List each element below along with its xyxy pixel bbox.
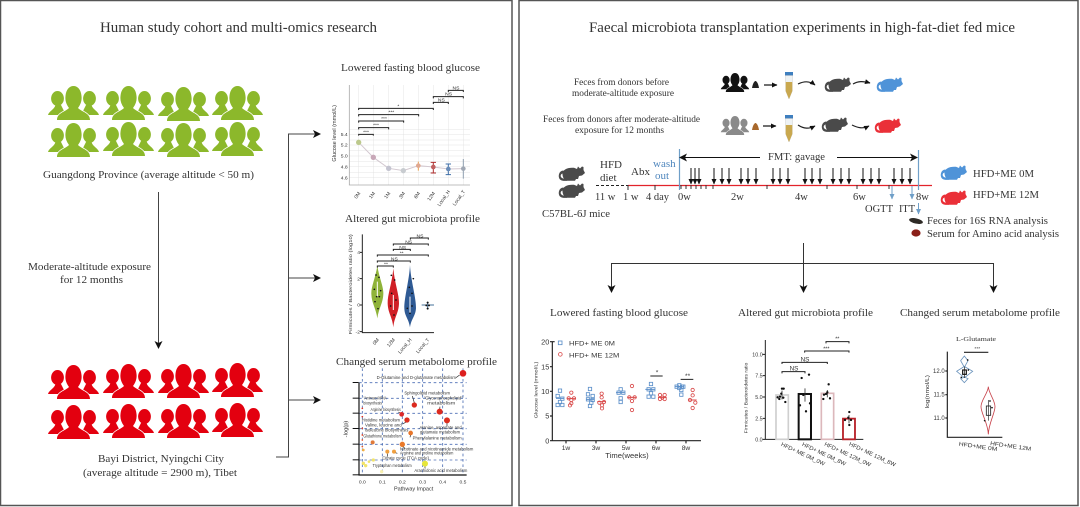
chart: human glucose: 1M xyxy=(383,191,392,200)
chart: L-glutamate violins: log(nmol/L) xyxy=(925,375,931,408)
chart: pathway impact: 0.3 xyxy=(419,480,426,486)
chart: pathway impact: Citrate cycle (TCA cycle) xyxy=(382,456,429,462)
chart: human microbiota violins: 4 xyxy=(357,250,360,256)
gavage arrows xyxy=(691,168,910,184)
chart: human glucose: 6M xyxy=(413,191,422,200)
legend: mouse groups xyxy=(941,166,1040,205)
heading: metabolome: Changed serum metabolome profile xyxy=(336,356,497,368)
chart: L-glutamate violins: L-Glutamate xyxy=(956,337,996,343)
icon: green population group xyxy=(48,86,263,157)
timeline: out xyxy=(655,170,669,182)
text: donors before: Feces from donors before xyxy=(574,77,669,88)
chart: pathway impact: Arginine and proline metabolism xyxy=(400,451,453,457)
legend: samples: Serum for Amino acid analysis xyxy=(927,229,1059,240)
chart: human glucose: 4.6 xyxy=(341,175,348,181)
chart: mouse glucose: 5 xyxy=(545,412,549,421)
chart: mouse glucose: 8w xyxy=(682,445,690,452)
icon: C57BL-6J mice xyxy=(559,166,585,198)
chart: mouse microbiota bars: *** xyxy=(823,347,829,353)
chart: human glucose: *** xyxy=(388,110,394,116)
chart: human microbiota violins: 0M xyxy=(372,337,381,347)
chart: human microbiota violins: NS xyxy=(417,233,424,239)
timeline: 0w xyxy=(678,192,691,203)
timeline: 4w xyxy=(795,192,808,203)
chart: pathway impact: biosynthesis xyxy=(363,401,382,407)
chart: human glucose xyxy=(332,85,470,208)
chart: mouse glucose: 6w xyxy=(652,445,660,452)
timeline: 11 w xyxy=(595,192,616,203)
chart: mouse microbiota bars: HFD+ ME 12M_8W xyxy=(848,442,897,469)
chart: human glucose: Local_T xyxy=(452,189,467,207)
chart: pathway impact xyxy=(343,368,473,493)
chart: mouse glucose: 15 xyxy=(541,362,549,371)
title: FMT experiments: Faecal microbiota transplantation experiments in high-fat-diet fed mice xyxy=(589,20,1015,36)
timeline: FMT: gavage xyxy=(768,151,825,163)
chart: pathway impact: isoleucine biosynthesis xyxy=(365,427,409,433)
timeline xyxy=(595,149,932,215)
chart: human glucose: 5.4 xyxy=(341,132,348,138)
chart: pathway impact: 0.1 xyxy=(379,480,386,486)
heading: mouse glucose: Lowered fasting blood glucose xyxy=(550,307,688,319)
chart: mouse glucose: 20 xyxy=(541,337,549,346)
chart: pathway impact: Arginine biosynthesis xyxy=(371,407,401,413)
chart: mouse microbiota bars: 10.0 xyxy=(752,352,763,358)
chart: mouse microbiota bars: 2.5 xyxy=(755,416,763,422)
chart: L-glutamate violins: HFD+ME 0M xyxy=(958,442,998,453)
chart: human glucose: * xyxy=(397,103,399,109)
heading: mouse microbiota: Altered gut microbiota profile xyxy=(738,307,873,319)
chart: human glucose: NS xyxy=(438,97,445,103)
chart: pathway impact: 0.2 xyxy=(399,480,406,486)
chart: human glucose: *** xyxy=(363,129,369,135)
chart: human microbiota violins: ** xyxy=(384,262,388,268)
blue test arrows xyxy=(892,186,918,214)
legend: samples xyxy=(909,216,1059,240)
chart: human microbiota violins xyxy=(348,233,434,355)
chart: pathway impact: Sphingolipid metabolism xyxy=(404,391,450,397)
heading: microbiota: Altered gut microbiota profile xyxy=(345,213,480,225)
chart: mouse microbiota bars: Firmicutes / Bacteroidetes ratio xyxy=(744,362,750,433)
chart: human glucose: 5.2 xyxy=(341,143,348,149)
icon: red population group xyxy=(48,363,263,439)
flow: before exposure xyxy=(721,72,903,99)
chart: L-glutamate violins xyxy=(925,337,1032,453)
chart: pathway impact: -log(p) xyxy=(343,420,349,437)
chart: human glucose: Local_H xyxy=(437,189,452,208)
chart: pathway impact: 0.4 xyxy=(439,480,446,486)
text: Bayi: (average altitude = 2900 m), Tibet xyxy=(83,467,237,479)
chart: pathway impact: Nicotinate and nicotinamide metabolism xyxy=(400,446,473,452)
chart: mouse glucose: 5w xyxy=(622,445,630,452)
chart: mouse microbiota bars: HFD+ ME 12M_0W xyxy=(823,442,872,469)
timeline: 1 w xyxy=(623,192,639,203)
heading: glucose: Lowered fasting blood glucose xyxy=(341,62,480,74)
chart: pathway impact: "Glycerophospholipid" xyxy=(424,396,463,402)
chart: mouse glucose: Time(weeks) xyxy=(605,453,649,460)
text: C57BL-6J: C57BL-6J mice xyxy=(542,209,610,220)
chart: mouse microbiota bars: ** xyxy=(835,337,839,343)
chart: mouse microbiota bars: NS xyxy=(790,366,798,373)
text: donors after: exposure for 12 months xyxy=(575,125,664,136)
chart: L-glutamate violins: 11.0 xyxy=(933,416,945,422)
chart: human microbiota violins: Firmicutes / Bacteroidetes ratio (log10) xyxy=(348,234,354,334)
text: donors before: moderate-altitude exposure xyxy=(572,89,674,99)
chart: pathway impact: Histidine metabolism xyxy=(362,418,400,424)
chart: L-glutamate violins: HFD+ME 12M xyxy=(990,441,1032,453)
chart: human microbiota violins: 0 xyxy=(357,303,360,309)
chart: mouse glucose: 1w xyxy=(562,445,570,452)
arrow: exposure xyxy=(158,192,160,348)
chart: human microbiota violins: Local_H xyxy=(397,337,414,355)
chart: human microbiota violins: NS xyxy=(405,239,413,245)
chart: pathway impact: 0.5 xyxy=(460,480,467,486)
chart: pathway impact: Alanine, aspartate and xyxy=(419,425,462,431)
chart: human glucose: *** xyxy=(381,116,387,122)
chart: mouse glucose: 10 xyxy=(541,387,549,396)
timeline: HFD xyxy=(600,159,622,171)
chart: mouse microbiota bars: HFD+ ME 0M_8W xyxy=(801,442,847,468)
chart: mouse microbiota bars xyxy=(744,337,897,469)
heading: mouse metabolome: Changed serum metabolome profile xyxy=(900,307,1060,319)
timeline: 6w xyxy=(853,192,866,203)
chart: mouse microbiota bars: 0.0 xyxy=(755,437,763,443)
text: donors before xyxy=(572,77,674,99)
legend: mouse groups: HFD+ME 0M xyxy=(973,169,1035,180)
chart: human glucose: 1M xyxy=(368,191,377,200)
chart: mouse glucose: HFD+ ME 12M xyxy=(569,352,619,359)
chart: human glucose: Glucose level (mmol/L) xyxy=(332,105,338,162)
chart: mouse microbiota bars: HFD+ ME 0M_0W xyxy=(780,442,826,468)
chart: human glucose: 0M xyxy=(353,191,362,200)
legend: samples: Feces for 16S RNA analysis xyxy=(927,216,1048,227)
panel: faecal microbiota transplantation xyxy=(519,0,1078,506)
chart: mouse glucose: ** xyxy=(685,373,691,380)
chart: human glucose: *** xyxy=(373,123,379,129)
chart: pathway impact: Phenylalanine metabolism xyxy=(413,436,462,442)
chart: pathway impact: Pathway Impact xyxy=(394,487,434,493)
text: exposure: for 12 months xyxy=(60,275,123,286)
chart: human microbiota violins: Local_T xyxy=(415,337,431,355)
chart: human microbiota violins: ** xyxy=(400,250,404,256)
chart: pathway impact: Valine, leucine and xyxy=(365,422,402,428)
legend: mouse groups: HFD+ME 12M xyxy=(973,190,1040,201)
chart: L-glutamate violins: 12.0 xyxy=(933,369,945,375)
text: donors after: Feces from donors after moderate-altitude xyxy=(543,114,700,125)
timeline: ITT xyxy=(899,204,916,215)
chart: pathway impact: "Aminoacyl-tRNA xyxy=(363,395,387,401)
arrow: tree to results xyxy=(611,243,994,292)
chart: mouse glucose xyxy=(533,337,701,460)
chart: human microbiota violins: NS xyxy=(399,245,407,251)
timeline: wash xyxy=(653,158,676,170)
chart: mouse glucose: * xyxy=(656,370,659,377)
timeline: 2w xyxy=(731,192,744,203)
timeline: 4 day xyxy=(646,192,670,203)
chart: human microbiota violins: 12M xyxy=(386,337,397,349)
text: Bayi xyxy=(83,453,237,479)
chart: human glucose: 12M xyxy=(426,191,437,202)
chart: human glucose: 5.0 xyxy=(341,154,348,160)
chart: human glucose: NS xyxy=(445,92,453,98)
chart: mouse microbiota bars: 5.0 xyxy=(755,395,763,401)
text: Guangdong: Guangdong Province (average altitude < 50 m) xyxy=(43,169,254,181)
chart: mouse microbiota bars: NS xyxy=(801,356,809,363)
timeline: 8w xyxy=(916,192,929,203)
chart: pathway impact: Tryptophan metabolism xyxy=(373,463,412,469)
text: Bayi: Bayi District, Nyingchi City xyxy=(98,453,224,465)
chart: L-glutamate violins: *** xyxy=(974,346,980,352)
chart: pathway impact: Glutathione metabolism xyxy=(363,434,402,440)
timeline: Abx xyxy=(631,166,650,178)
chart: human microbiota violins: 2 xyxy=(357,276,360,282)
chart: human glucose: NS xyxy=(453,85,460,91)
timeline: diet xyxy=(600,172,616,184)
chart: mouse microbiota bars: 7.5 xyxy=(755,374,763,380)
timeline: OGTT xyxy=(865,204,894,215)
panel: human study cohort xyxy=(0,0,512,506)
text: exposure: Moderate-altitude exposure xyxy=(28,262,151,273)
chart: human microbiota violins: NS xyxy=(391,256,398,262)
chart: human microbiota violins: -2 xyxy=(356,329,360,335)
flow: after exposure xyxy=(721,115,901,142)
chart: human glucose: 4.8 xyxy=(341,164,348,170)
chart: pathway impact: 0.0 xyxy=(359,480,366,486)
chart: pathway impact: metabolism xyxy=(427,401,455,407)
arrow: bracket to results xyxy=(276,134,320,457)
chart: pathway impact: D-Glutamine and D-glutamate metabolism xyxy=(377,375,456,381)
title: human study: Human study cohort and multi-omics research xyxy=(100,20,377,36)
text: exposure xyxy=(28,262,151,286)
chart: mouse glucose: 3w xyxy=(592,445,600,452)
chart: mouse glucose: Glucose level (mmol/L) xyxy=(533,361,539,418)
chart: pathway impact: Arachidonic acid metabolism xyxy=(414,468,467,474)
chart: mouse glucose: HFD+ ME 0M xyxy=(569,341,615,348)
chart: pathway impact: glutamate metabolism xyxy=(420,430,460,436)
chart: L-glutamate violins: 11.5 xyxy=(933,393,945,399)
text: donors after xyxy=(543,114,700,136)
chart: mouse glucose: 0 xyxy=(545,436,549,445)
chart: human glucose: 3M xyxy=(398,191,407,200)
